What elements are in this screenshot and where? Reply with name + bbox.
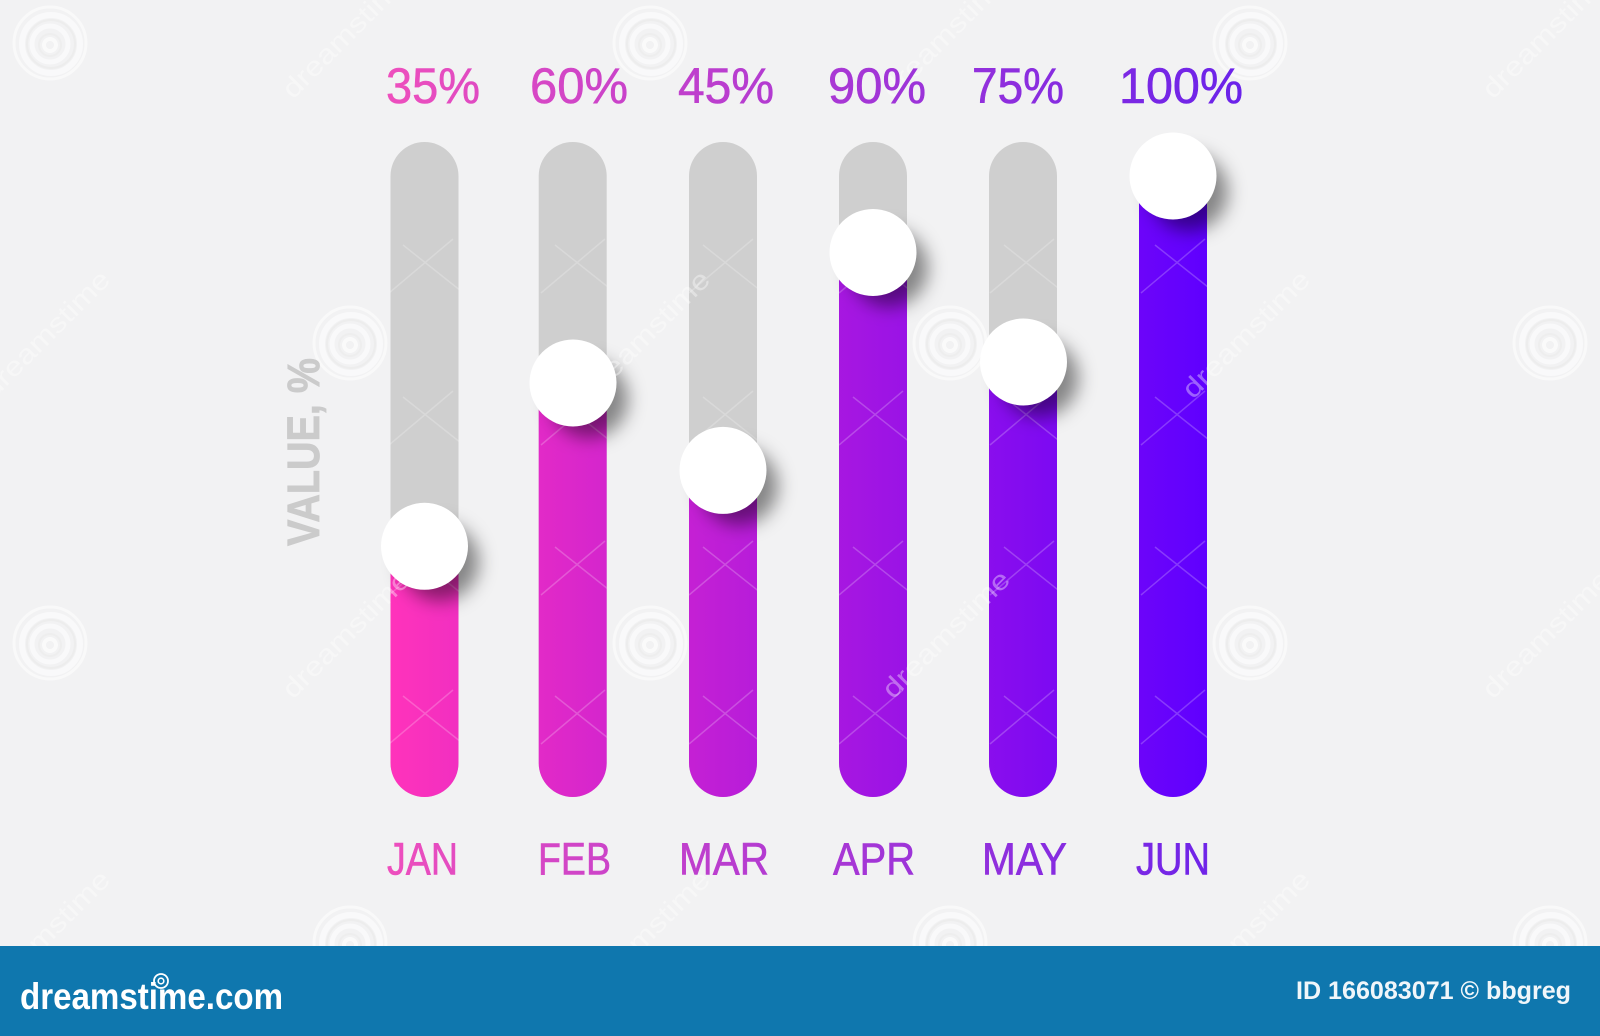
- April fill: [839, 252, 907, 797]
- percentage labels: 35%: [386, 58, 480, 114]
- May fill: [989, 362, 1057, 797]
- January fill: [390, 546, 458, 797]
- percentage labels: 60%: [530, 58, 628, 114]
- month labels: APR: [833, 834, 915, 884]
- column: April 90%: [830, 142, 928, 797]
- footer image id and credit: ID 166083071 © bbgreg: [1296, 977, 1571, 1005]
- April track: [839, 142, 907, 797]
- column: January 35%: [381, 142, 479, 797]
- column: May 75%: [980, 142, 1078, 797]
- percentage labels: 90%: [828, 58, 926, 114]
- watermark wordmarks: dreamstime: [276, 564, 416, 704]
- watermark wordmarks: dreamstime: [576, 864, 716, 1004]
- January track: [390, 142, 458, 797]
- watermark wordmarks: dreamstime: [1176, 864, 1316, 1004]
- watermark wordmarks: dreamstime: [876, 564, 1016, 704]
- month labels: FEB: [538, 834, 611, 884]
- percentage labels: 100%: [1119, 58, 1243, 114]
- y axis title: VALUE, %: [278, 358, 329, 546]
- percentage labels: 45%: [678, 58, 774, 114]
- month labels: MAR: [679, 834, 769, 884]
- February slider knob: [530, 340, 616, 426]
- month labels: JUN: [1136, 834, 1210, 884]
- May slider knob: [980, 318, 1067, 406]
- May track: [989, 142, 1057, 797]
- March fill: [689, 470, 757, 797]
- March track: [689, 142, 757, 797]
- column: June 100%: [1130, 132, 1228, 797]
- percentage labels: 75%: [972, 58, 1064, 114]
- column: March 45%: [680, 142, 778, 797]
- watermark wordmarks: dreamstime: [1176, 264, 1316, 404]
- April slider knob: [830, 209, 916, 296]
- icon: logo spiral: [154, 974, 168, 988]
- February track: [539, 142, 607, 797]
- June slider knob: [1130, 132, 1216, 220]
- percentage labels: [386, 58, 1243, 114]
- column: February 60%: [530, 142, 628, 797]
- month labels: [387, 834, 1210, 884]
- watermark wordmarks: dreamstime: [576, 264, 716, 404]
- watermark wordmarks: dreamstime: [1476, 564, 1600, 704]
- February fill: [539, 383, 607, 797]
- month labels: JAN: [387, 834, 458, 884]
- March slider knob: [680, 427, 766, 514]
- June fill: [1139, 142, 1207, 797]
- month labels: MAY: [982, 834, 1067, 884]
- footer logo wordmark: dreamstime.com: [20, 976, 283, 1017]
- footer bar: [0, 946, 1600, 1036]
- January slider knob: [381, 503, 468, 590]
